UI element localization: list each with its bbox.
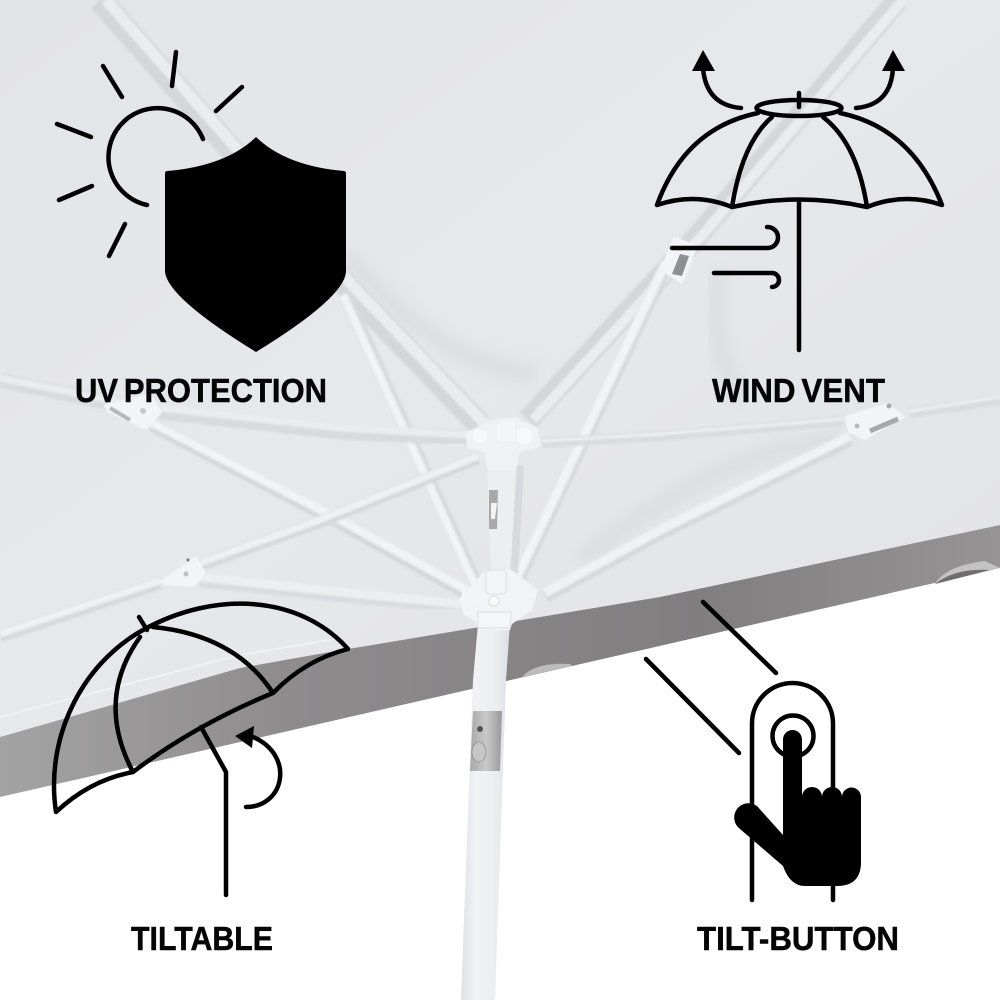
label: wind vent: WIND VENT	[712, 373, 885, 410]
sun arc	[108, 108, 203, 205]
vent arrows	[692, 50, 905, 108]
joint right	[845, 403, 906, 440]
stretcher right	[545, 436, 850, 596]
rib top right	[528, 0, 903, 420]
joint lower left	[160, 556, 206, 587]
canopy underside	[0, 0, 1000, 737]
rib lower left	[0, 456, 478, 636]
bent pole	[201, 727, 226, 895]
icon: wind vent	[657, 50, 942, 350]
hem vent openings	[522, 561, 1000, 677]
joint top right	[660, 236, 698, 284]
canopy hem	[0, 525, 1000, 797]
rib left	[0, 378, 470, 438]
icon: tiltable umbrella	[54, 604, 348, 895]
tilt mechanism plate	[470, 711, 502, 771]
stretcher lower left	[200, 577, 462, 606]
label: tilt button: TILT-BUTTON	[697, 921, 899, 958]
rib right	[542, 397, 1000, 443]
icon: UV protection	[57, 52, 346, 352]
joint left	[103, 393, 162, 430]
label: tiltable: TILTABLE	[131, 921, 273, 958]
rotate arrow	[235, 726, 280, 807]
label: UV protection: UV PROTECTION	[75, 373, 327, 410]
lower hub	[460, 570, 538, 630]
tilted canopy	[54, 604, 348, 812]
frame ribs	[0, 0, 1000, 636]
pole	[461, 624, 510, 1000]
top pin	[139, 617, 147, 630]
rib top left	[100, 0, 486, 425]
wind lines	[672, 227, 779, 287]
stretcher top right	[510, 262, 668, 592]
button capsule	[752, 683, 833, 900]
vent pin	[797, 93, 801, 107]
umbrella pole	[797, 202, 801, 350]
upper hub	[466, 418, 541, 470]
shield	[165, 137, 346, 352]
pointer lines	[646, 602, 776, 753]
stretcher left	[152, 423, 468, 594]
umbrella canopy	[657, 113, 942, 207]
icon: tilt button	[646, 602, 861, 900]
hand	[734, 730, 861, 886]
sun rays	[57, 52, 242, 256]
press ring	[772, 716, 814, 756]
vent ring	[756, 100, 842, 116]
central tube	[487, 462, 524, 575]
stretcher top left	[343, 295, 480, 592]
